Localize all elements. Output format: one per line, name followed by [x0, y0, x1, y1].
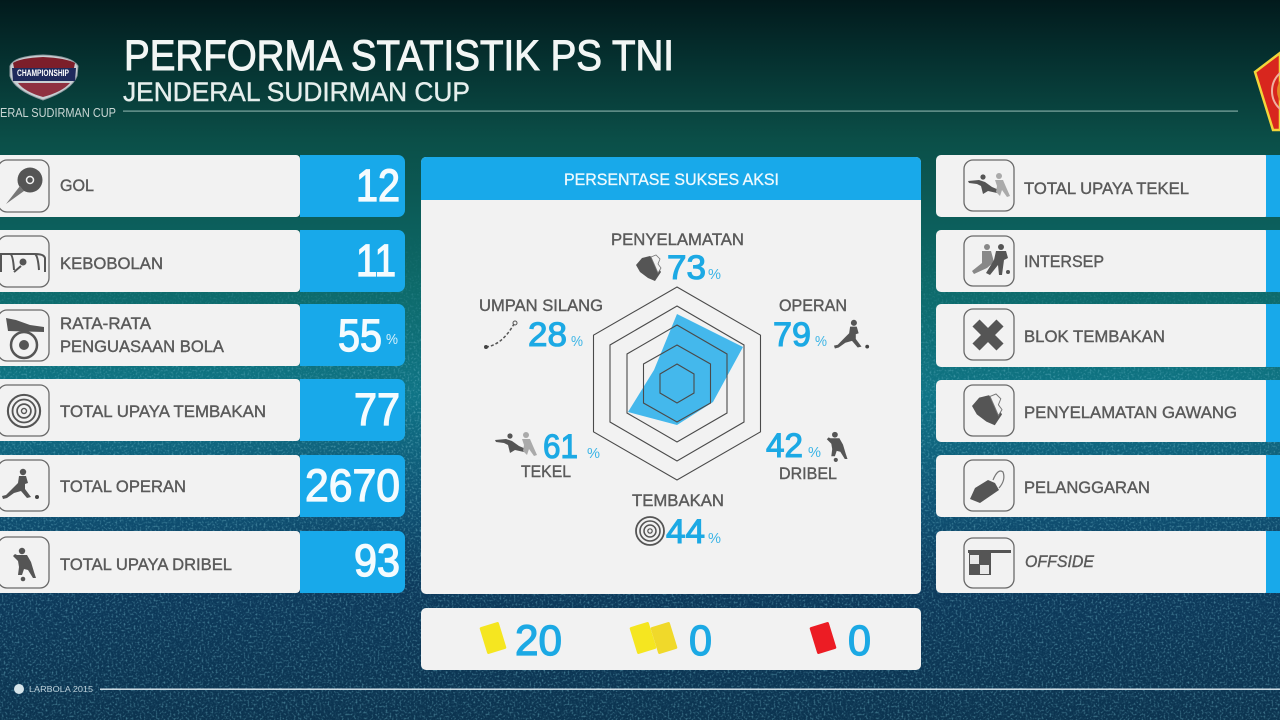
row: total upaya tembakan — [0, 379, 405, 441]
metric: tembakan — [632, 491, 724, 551]
metric: umpan silang — [479, 296, 603, 354]
row: total upaya tekel — [936, 155, 1280, 217]
label: OFFSIDE — [1025, 552, 1095, 571]
value: 55 — [338, 310, 382, 361]
footer credit — [14, 684, 94, 694]
row: total upaya dribel — [0, 531, 405, 593]
metric: penyelamatan: % — [708, 266, 721, 283]
metric: operan: OPERAN — [779, 296, 847, 315]
metric: penyelamatan: PENYELAMATAN — [611, 230, 744, 249]
icon: whistle — [964, 460, 1014, 511]
red card — [809, 617, 871, 665]
metric: dribel: 42 — [766, 427, 803, 465]
label: TOTAL UPAYA TEKEL — [1024, 179, 1189, 198]
label: BLOK TEMBAKAN — [1024, 327, 1165, 346]
label: TOTAL UPAYA TEMBAKAN — [60, 402, 266, 421]
metric: tekel: 61 — [543, 428, 578, 466]
panel: persentase sukses aksi — [421, 157, 921, 594]
metric: tekel: TEKEL — [521, 462, 571, 481]
metric: operan: 79 — [773, 316, 811, 354]
metric: umpan silang: 28 — [528, 316, 567, 354]
row: gol — [0, 155, 405, 217]
value: 12 — [356, 160, 400, 211]
row: kebobolan — [0, 230, 405, 292]
club crest — [1255, 53, 1280, 130]
icon: tackle — [964, 160, 1014, 211]
title: PERFORMA STATISTIK PS TNI — [124, 32, 674, 80]
icon: interception — [964, 236, 1014, 286]
row: penyelamatan gawang — [936, 380, 1280, 442]
metric: tembakan: 44 — [666, 513, 705, 551]
row: blok tembakan — [936, 304, 1280, 367]
icon: offside flag — [964, 538, 1014, 588]
value: 2670 — [305, 460, 400, 511]
row: total operan — [0, 455, 405, 517]
metric: operan: % — [815, 333, 827, 350]
metric: dribel: DRIBEL — [779, 464, 837, 483]
metric: tembakan: % — [708, 530, 721, 547]
icon: boot and ball — [0, 310, 49, 361]
metric: dribel: % — [808, 444, 821, 461]
icon: goal — [0, 236, 49, 287]
metric: tekel: % — [587, 445, 600, 462]
icon: block cross — [964, 309, 1014, 360]
footer rule — [100, 688, 1280, 690]
panel: cards — [421, 608, 921, 670]
red card: 0 — [848, 617, 871, 665]
metric: tembakan: TEMBAKAN — [632, 491, 724, 510]
row: penguasaan bola: PENGUASAAN BOLA — [60, 337, 225, 356]
metric: operan — [773, 296, 869, 354]
header rule — [123, 110, 1238, 112]
league logo: CHAMPIONSHIP — [17, 68, 69, 78]
panel header — [421, 157, 921, 200]
label: TOTAL OPERAN — [60, 477, 186, 496]
footer credit: LARBOLA 2015 — [29, 685, 94, 694]
league logo: ERAL SUDIRMAN CUP — [0, 105, 116, 120]
value: 93 — [354, 535, 400, 586]
label: PELANGGARAN — [1024, 478, 1150, 497]
double yellow card — [629, 617, 712, 665]
double yellow card: 0 — [689, 617, 712, 665]
metric: umpan silang: % — [571, 333, 583, 350]
row: pelanggaran — [936, 455, 1280, 517]
label: KEBOBOLAN — [60, 254, 163, 273]
panel header: PERSENTASE SUKSES AKSI — [564, 170, 779, 189]
yellow card: 20 — [515, 617, 562, 665]
label: GOL — [60, 176, 94, 195]
metric: dribel — [766, 427, 848, 483]
label: PENYELAMATAN GAWANG — [1024, 403, 1237, 422]
label: INTERSEP — [1024, 252, 1104, 271]
metric: tekel — [495, 428, 600, 481]
subtitle: JENDERAL SUDIRMAN CUP — [123, 77, 470, 107]
icon: passing player — [0, 460, 49, 511]
row: offside — [936, 531, 1280, 593]
metric: penyelamatan: 73 — [667, 249, 706, 287]
yellow card — [479, 617, 562, 665]
radar chart — [594, 287, 760, 480]
league logo — [0, 55, 116, 120]
value: 11 — [356, 235, 396, 286]
row: penguasaan bola — [0, 304, 405, 366]
value: 77 — [354, 384, 400, 435]
label: RATA-RATA — [60, 314, 152, 333]
row: intersep — [936, 230, 1280, 292]
label: TOTAL UPAYA DRIBEL — [60, 555, 232, 574]
icon: ball — [0, 160, 49, 212]
icon: dribbling player — [0, 537, 49, 588]
row: penguasaan bola: % — [386, 331, 398, 348]
metric: umpan silang: UMPAN SILANG — [479, 296, 603, 315]
icon: glove — [964, 385, 1014, 436]
metric: penyelamatan — [611, 230, 744, 287]
icon: target — [0, 385, 49, 436]
